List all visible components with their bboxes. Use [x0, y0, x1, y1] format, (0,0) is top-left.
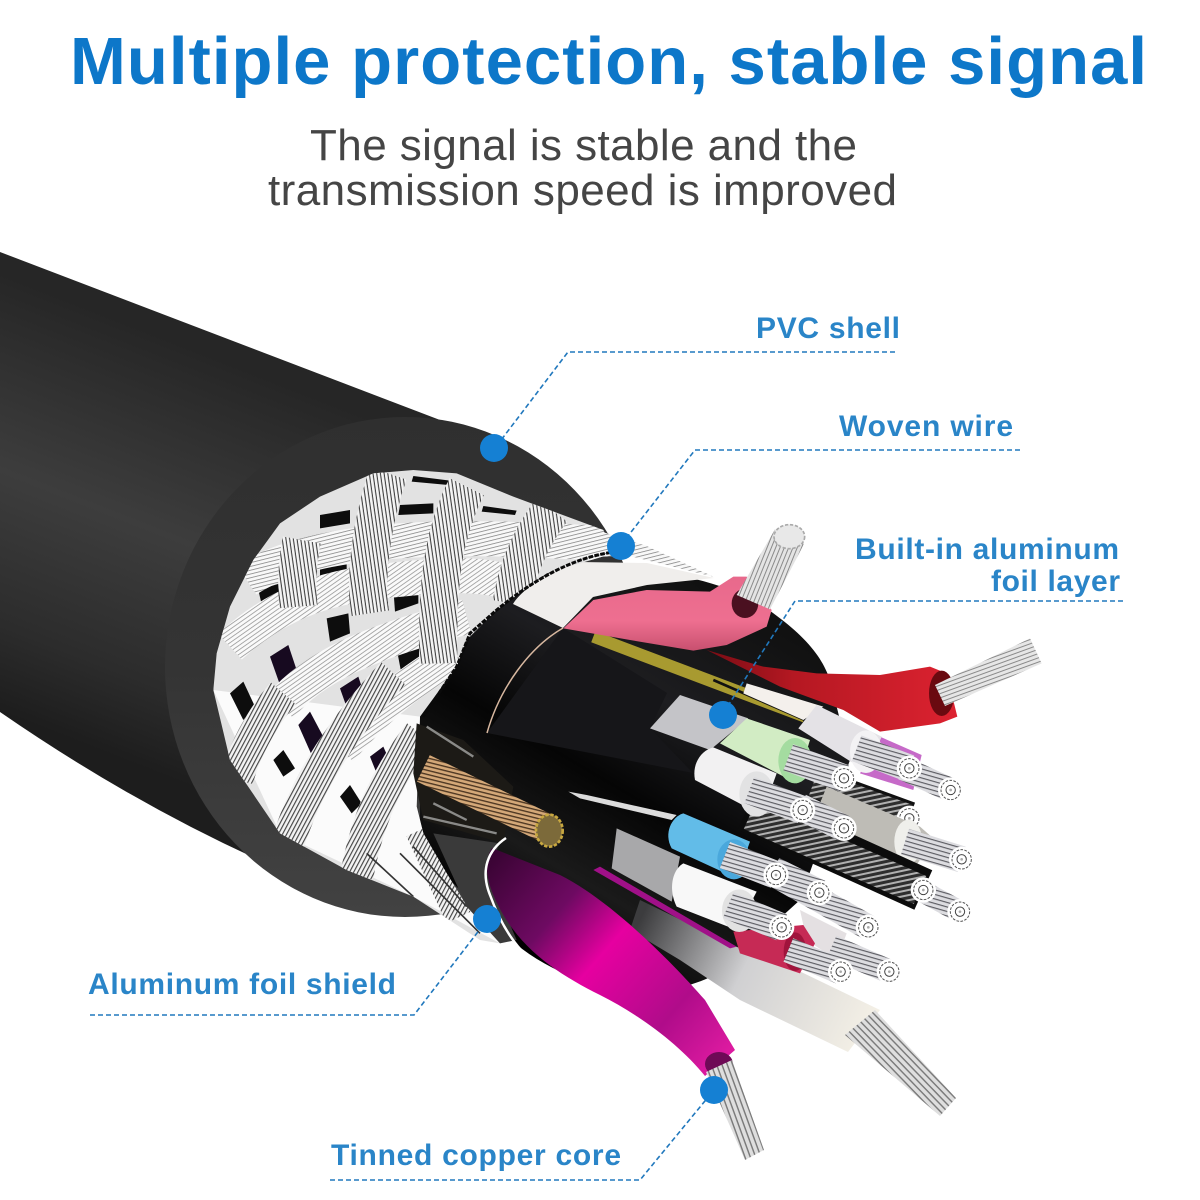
- braid ribbons running across: [230, 539, 607, 750]
- thin lower strand: [920, 890, 973, 924]
- foil inner layer: [513, 562, 714, 628]
- drain wire gold strands: [423, 768, 563, 847]
- blue tube: [668, 813, 789, 888]
- cable jacket: [0, 252, 440, 917]
- braid lower crossing ribbons: [237, 673, 460, 917]
- twisted black cable lower: [747, 810, 936, 903]
- title: Multiple protection, stable signal: [70, 24, 1147, 99]
- white tube middle: [694, 747, 815, 823]
- red wire: [707, 638, 1042, 732]
- braid ribbons running lengthwise: [297, 473, 552, 663]
- label: Tinned copper core: [330, 1076, 728, 1180]
- braid lower white base: [213, 690, 500, 943]
- large white wire: [630, 900, 956, 1116]
- grey tube wire: [813, 787, 974, 872]
- cylinder lit panel: [487, 628, 693, 773]
- label: Woven wire: Woven wire: [839, 410, 1013, 443]
- braid holes: [230, 476, 517, 814]
- strand second blue: [773, 870, 832, 905]
- braid lower dark strands: [367, 847, 480, 933]
- label: PVC shell: [480, 312, 900, 462]
- crimson tube: [733, 925, 853, 984]
- magenta accent sliver: [593, 867, 737, 948]
- braid purple-tinted holes: [270, 645, 386, 771]
- copper foil edge: [487, 628, 563, 733]
- yellow shielded stripe: [593, 637, 805, 717]
- pink wire: [563, 525, 805, 651]
- label: PVC shell: PVC shell: [756, 312, 900, 345]
- subtitle: [268, 121, 897, 215]
- magenta wire hole: [705, 1052, 733, 1076]
- label: Tinned copper core: Tinned copper core: [331, 1139, 621, 1172]
- braided woven shield: [207, 463, 713, 947]
- magenta small wire: [860, 737, 963, 803]
- label: Aluminum foil shield: [88, 905, 501, 1015]
- mottled shield behind drain wire: [413, 723, 513, 843]
- subtitle: The signal is stable and the: [310, 121, 857, 170]
- label: Built-in aluminum foil layer: Built-in aluminum: [855, 533, 1119, 566]
- white tube lower: [672, 863, 794, 940]
- subtitle: transmission speed is improved: [268, 166, 897, 215]
- label: Built-in aluminum foil layer: [709, 533, 1123, 729]
- strand behind white wire: [800, 807, 857, 841]
- grey foil pieces: [650, 695, 748, 750]
- torn braid edge: [423, 552, 617, 717]
- inner core cylinder: [420, 565, 850, 991]
- green tube: [720, 718, 857, 791]
- braid tip strands: [597, 530, 713, 577]
- white tube top: [798, 705, 922, 781]
- magenta wire copper strand: [706, 1060, 764, 1160]
- label: Aluminum foil shield: Aluminum foil shield: [88, 968, 396, 1001]
- grey foil at bottom: [433, 833, 517, 943]
- jacket end face ring: [165, 417, 645, 917]
- magenta wire: [486, 838, 764, 1160]
- foil wrap white strip: [743, 683, 823, 720]
- small white tube and strand: [800, 910, 902, 984]
- label: Built-in aluminum foil layer: foil layer: [991, 565, 1120, 598]
- strand behind blue wire: [767, 870, 881, 940]
- wire bundle: [563, 525, 1042, 984]
- label: Woven wire: [607, 410, 1020, 560]
- twisted black cable upper: [813, 783, 922, 831]
